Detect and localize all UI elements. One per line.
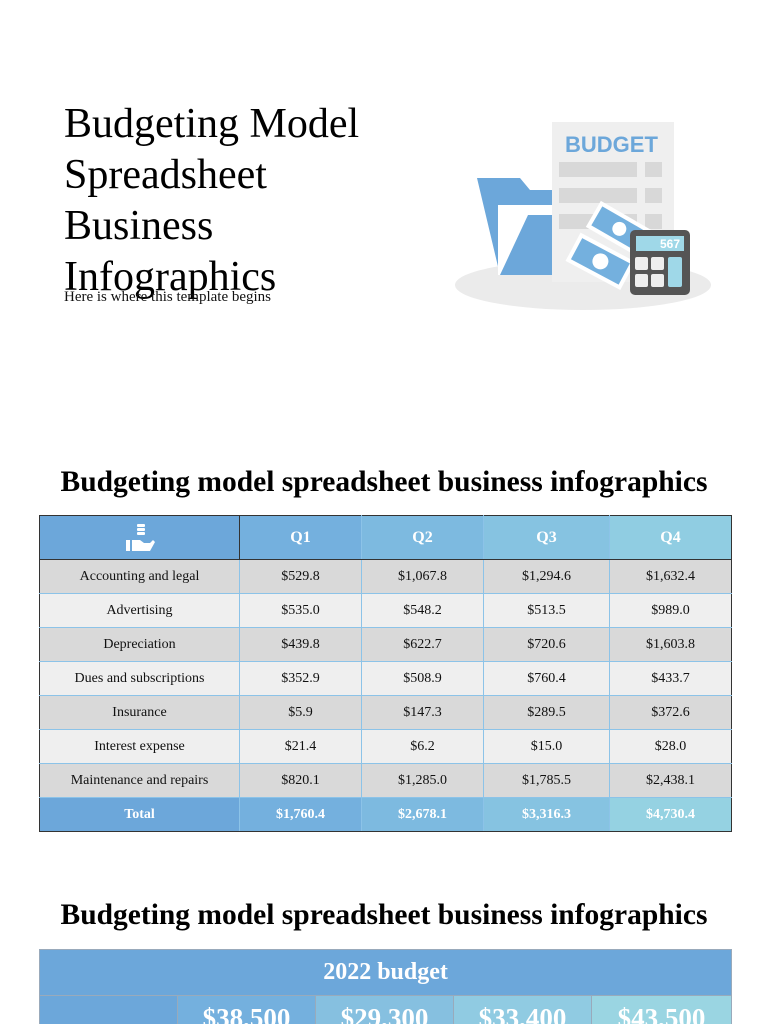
table: quarterly expenses: $535.0 <box>281 602 320 618</box>
illustration: budget: 567 <box>660 237 680 251</box>
table: quarterly expenses: $372.6 <box>651 704 690 720</box>
table: quarterly expenses: Accounting and legal <box>80 568 199 584</box>
table: quarterly expenses: $1,785.5 <box>522 772 571 788</box>
table: quarterly expenses: $720.6 <box>527 636 566 652</box>
table: quarterly expenses: $513.5 <box>527 602 566 618</box>
table: quarterly expenses: $1,760.4 <box>276 806 325 822</box>
table: quarterly expenses: Advertising <box>106 602 173 618</box>
table: quarterly expenses: $1,603.8 <box>646 636 695 652</box>
table: quarterly expenses: Q4 <box>660 528 681 546</box>
table: quarterly expenses: $508.9 <box>403 670 442 686</box>
table: quarterly expenses: $820.1 <box>281 772 320 788</box>
table: quarterly expenses: $3,316.3 <box>522 806 571 822</box>
table: quarterly expenses <box>39 515 732 832</box>
table: quarterly expenses: $433.7 <box>651 670 690 686</box>
table: quarterly expenses: $989.0 <box>651 602 690 618</box>
illustration: budget <box>455 122 711 310</box>
table: quarterly expenses: $439.8 <box>281 636 320 652</box>
table: quarterly expenses: $548.2 <box>403 602 442 618</box>
table: quarterly expenses: Q3 <box>536 528 557 546</box>
table: 2022 budget <box>39 949 732 1024</box>
table: quarterly expenses: $1,632.4 <box>646 568 695 584</box>
table: quarterly expenses: $2,678.1 <box>398 806 447 822</box>
table: quarterly expenses: Insurance <box>112 704 167 720</box>
heading: table 1: Budgeting model spreadsheet business infographics <box>61 466 707 498</box>
table: quarterly expenses: $352.9 <box>281 670 320 686</box>
table: quarterly expenses: $21.4 <box>285 738 316 754</box>
table: quarterly expenses: $1,294.6 <box>522 568 571 584</box>
table: quarterly expenses: $6.2 <box>410 738 435 754</box>
table: quarterly expenses: $4,730.4 <box>646 806 695 822</box>
table: quarterly expenses: $1,285.0 <box>398 772 447 788</box>
table: quarterly expenses: $5.9 <box>288 704 313 720</box>
table: quarterly expenses: Total <box>124 806 155 822</box>
table: quarterly expenses: $529.8 <box>281 568 320 584</box>
icon: hand with coins <box>126 524 155 551</box>
table: quarterly expenses: $1,067.8 <box>398 568 447 584</box>
table: quarterly expenses: $289.5 <box>527 704 566 720</box>
title: Budgeting Model Spreadsheet Business Infographics <box>64 101 359 300</box>
table: quarterly expenses: $760.4 <box>527 670 566 686</box>
table: quarterly expenses: $147.3 <box>403 704 442 720</box>
illustration: budget: BUDGET <box>565 132 658 157</box>
table: quarterly expenses: Depreciation <box>103 636 176 652</box>
table: quarterly expenses: Dues and subscriptions <box>75 670 204 686</box>
heading: table 2: Budgeting model spreadsheet business infographics <box>61 899 707 931</box>
table: quarterly expenses: Interest expense <box>94 738 185 754</box>
table: quarterly expenses: $2,438.1 <box>646 772 695 788</box>
table: quarterly expenses: Q2 <box>412 528 433 546</box>
table: quarterly expenses: Q1 <box>290 528 311 546</box>
table: quarterly expenses: $15.0 <box>531 738 562 754</box>
table: quarterly expenses: $28.0 <box>655 738 686 754</box>
table: quarterly expenses: Maintenance and repairs <box>71 772 208 788</box>
subtitle: Here is where this template begins <box>64 289 271 305</box>
table: quarterly expenses: $622.7 <box>403 636 442 652</box>
table: 2022 budget: 2022 budget <box>323 959 448 985</box>
